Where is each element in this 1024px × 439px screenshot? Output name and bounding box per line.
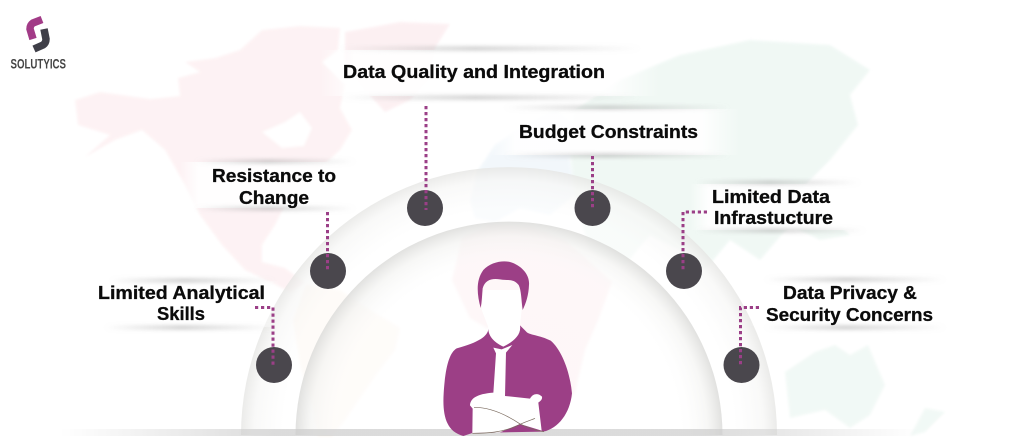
label: Data Quality and Integration [320, 47, 660, 99]
outer semicircle [241, 167, 777, 435]
label: Limited Analytical Skills: Limited Analytical [98, 283, 265, 303]
label: Budget Constraints: Budget Constraints [519, 122, 698, 142]
label: Resistance to Change [180, 160, 365, 210]
label: Resistance to Change: Change [239, 188, 309, 208]
crossed arms [470, 393, 542, 433]
map: North America [75, 26, 352, 292]
hair [478, 261, 529, 310]
node: Limited Analytical Skills [255, 308, 292, 383]
ground shadow [60, 429, 920, 436]
label: Limited Data Infrastucture: Limited Data [712, 187, 831, 207]
logo wordmark: SOLUTYICS [10, 56, 66, 72]
logo: Solutyics [10, 20, 66, 72]
label: Data Quality and Integration: Data Quality and Integration [343, 62, 605, 82]
map: Australia [785, 345, 885, 428]
label: Limited Data Infrastucture [690, 181, 870, 232]
node: Limited Data Infrastucture [666, 212, 707, 289]
label: Data Privacy & Security Concerns: Security Concerns [766, 305, 933, 325]
map: New Zealand [910, 408, 945, 436]
label: Budget Constraints [490, 106, 740, 157]
label: Limited Analytical Skills [90, 279, 280, 329]
logo mark [30, 20, 42, 39]
node: Data Privacy & Security Concerns [724, 308, 760, 383]
inner semicircle [296, 222, 722, 435]
tie and collar [493, 345, 512, 397]
jacket [443, 325, 572, 436]
label: Data Privacy & Security Concerns: Data Privacy & [783, 283, 917, 303]
node: Resistance to Change [310, 212, 346, 289]
face and neck [482, 290, 527, 353]
node: Budget Constraints [574, 156, 610, 226]
label: Limited Analytical Skills: Skills [157, 304, 205, 324]
map: South America [293, 285, 400, 436]
map: Hudson Bay [262, 112, 312, 148]
map: Greenland [345, 22, 450, 112]
map: Africa [452, 224, 612, 428]
node: Data Quality and Integration [407, 106, 443, 226]
arm outlines [472, 407, 544, 433]
label: Data Privacy & Security Concerns [750, 278, 950, 329]
map: Europe [470, 110, 575, 222]
map: Asia [570, 40, 870, 270]
person with crossed arms [443, 261, 572, 436]
label: Limited Data Infrastucture: Infrastucture [714, 208, 833, 228]
label: Resistance to Change: Resistance to [212, 166, 336, 186]
